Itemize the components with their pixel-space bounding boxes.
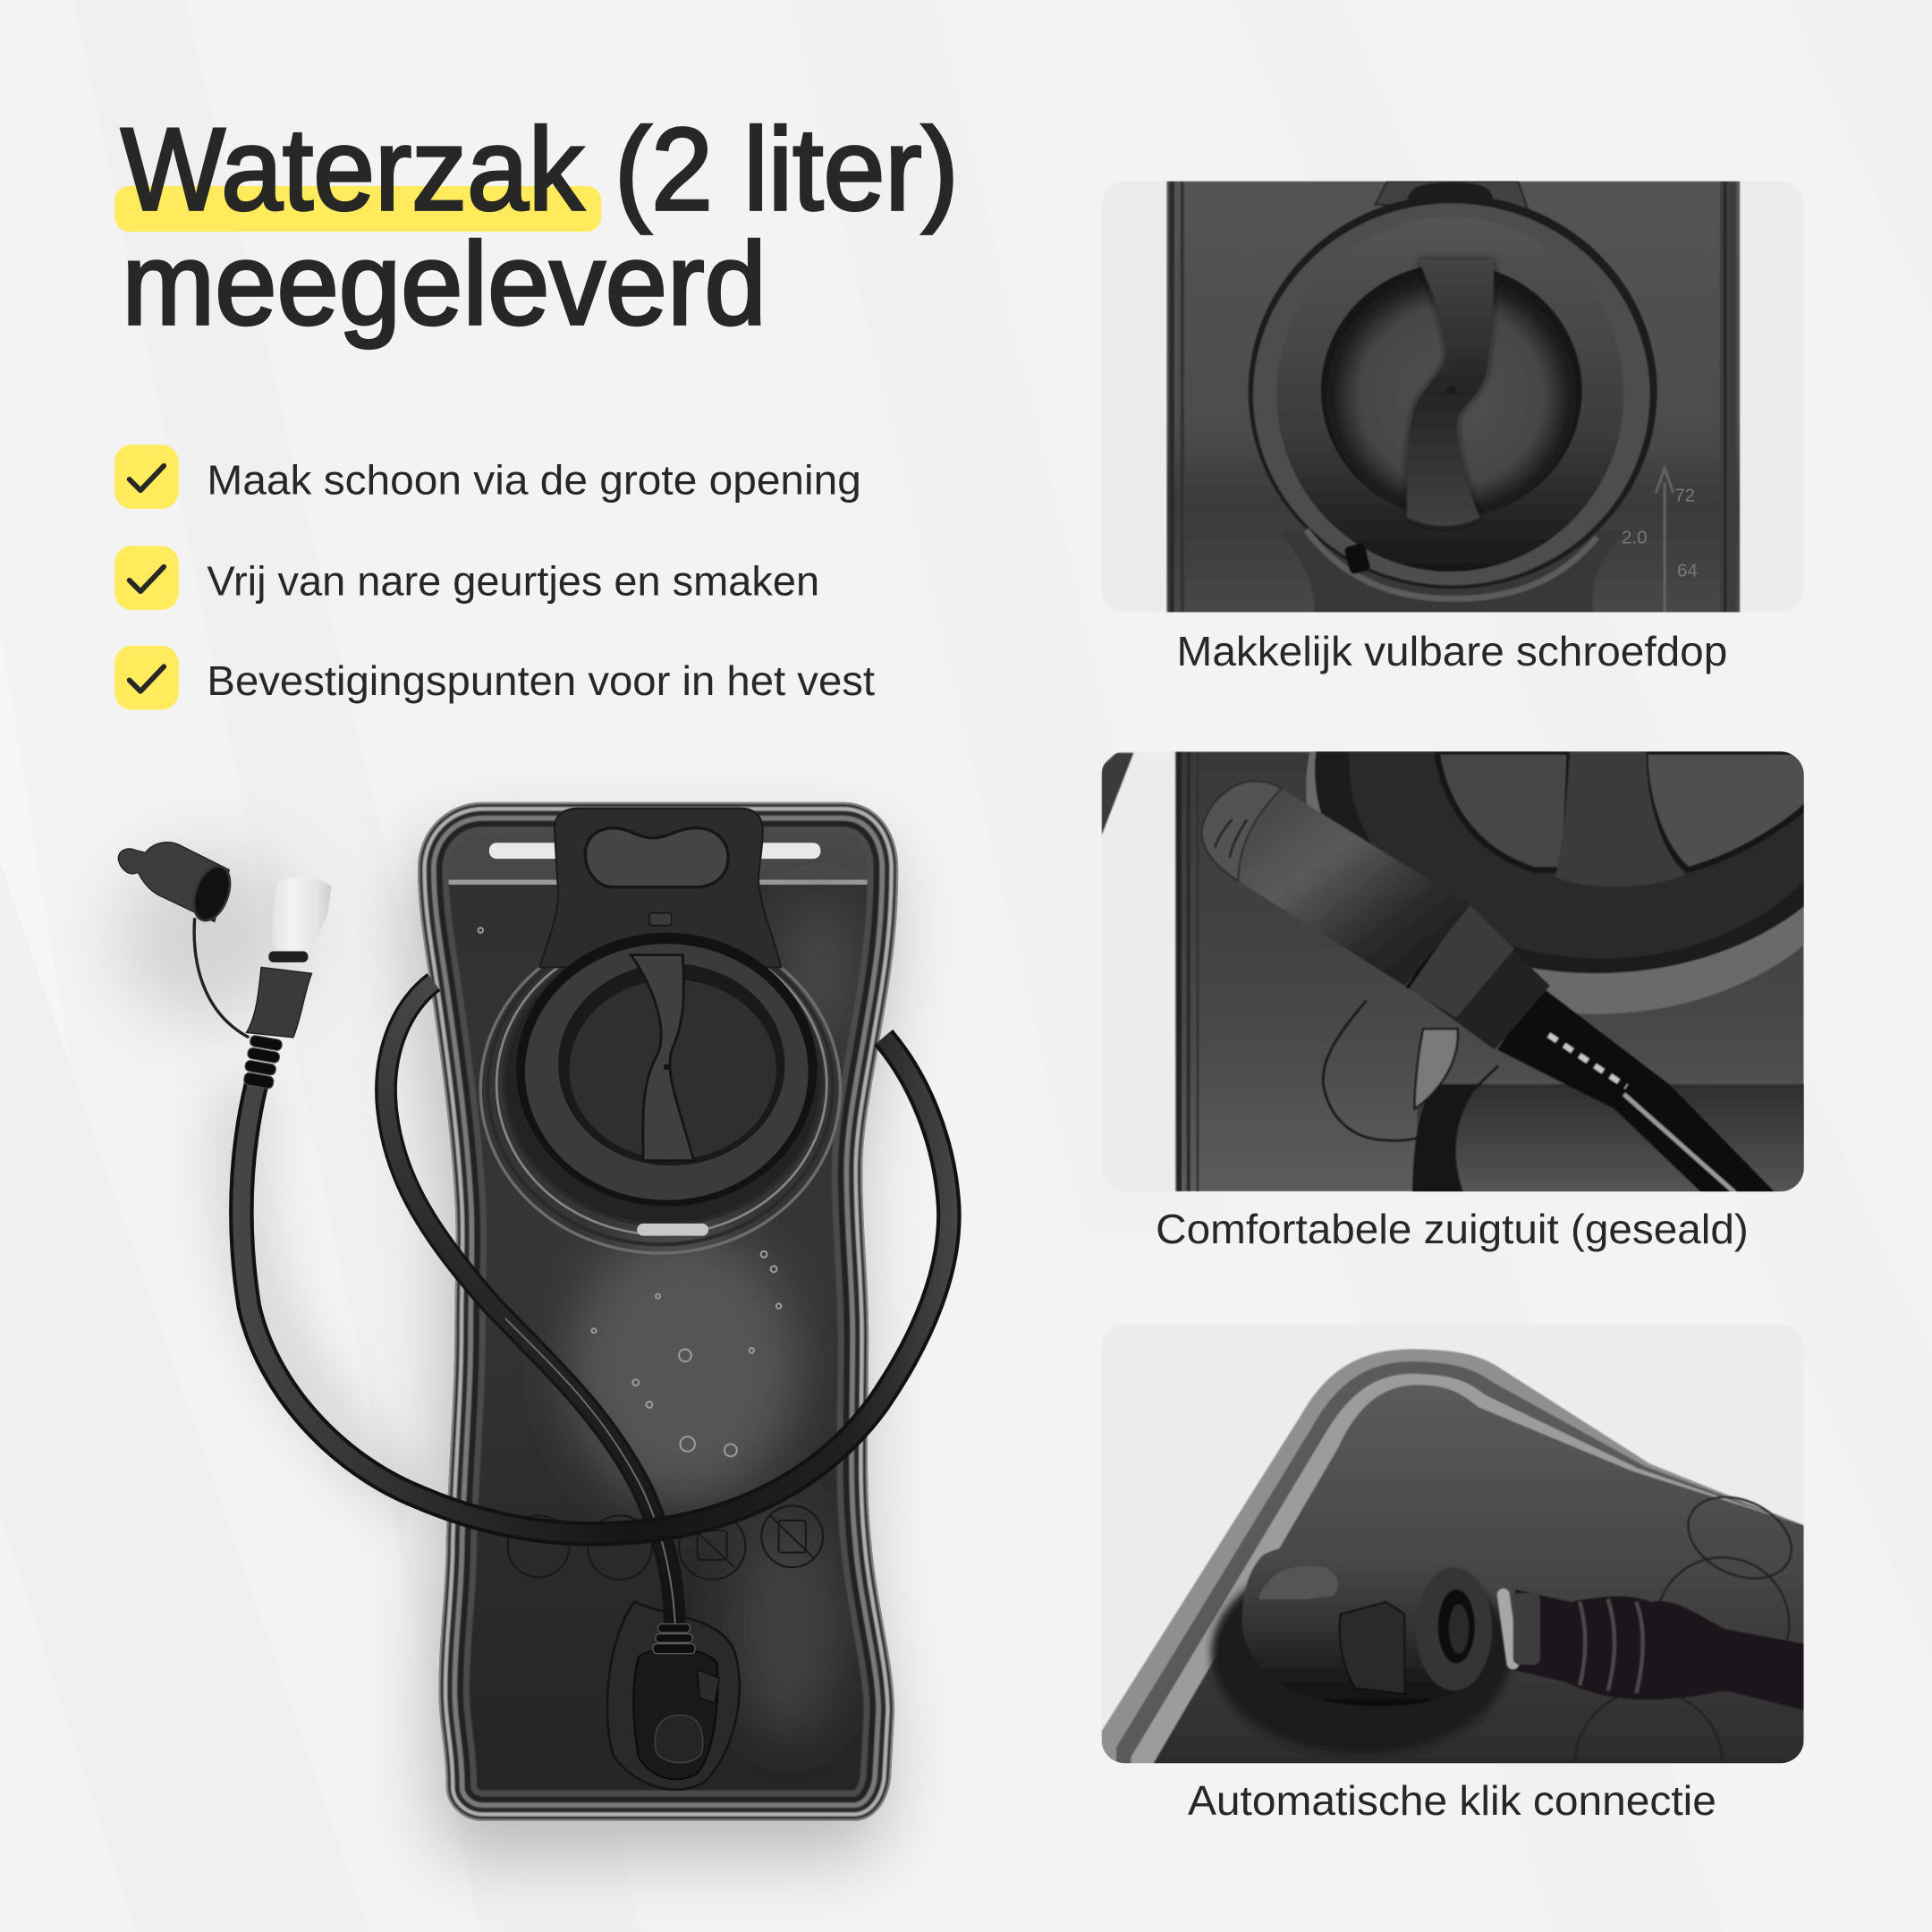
- title highlight: [114, 186, 601, 232]
- bottom connector ribs: [653, 1624, 695, 1654]
- hang slots: [489, 843, 820, 859]
- title line 1: Waterzak (2 liter): [121, 104, 959, 234]
- feature 1: Maak schoon via de grote opening: [207, 456, 861, 503]
- hose loop front: [242, 1038, 949, 1534]
- capacity marks: 64: [1677, 561, 1698, 581]
- bottom connector plate: [607, 1602, 740, 1790]
- caption 2: Comfortabele zuigtuit (geseald): [1156, 1206, 1749, 1252]
- panel: filler cap detail: [1165, 181, 1741, 613]
- product photo: hydration bladder with hose: [117, 789, 949, 1856]
- hose barb connector: [243, 1035, 283, 1089]
- panel 1 photo: [1167, 181, 1740, 613]
- pictogram row: [508, 1505, 823, 1580]
- lower cap slot: [637, 1224, 708, 1236]
- panel 1 background: [1102, 181, 1804, 613]
- fill cap seam rings: [480, 926, 840, 1253]
- product shadow: [117, 836, 891, 1856]
- title: [114, 104, 959, 349]
- caption 3: Automatische klik connectie: [1188, 1777, 1716, 1824]
- capacity marks: 72: [1674, 486, 1695, 506]
- feature 3: [114, 646, 875, 709]
- panel 2 photo: [1102, 751, 1804, 1191]
- bite valve: [247, 877, 332, 1038]
- handle tab: [539, 809, 781, 967]
- feature 2: [114, 546, 819, 610]
- feature 2: Vrij van nare geurtjes en smaken: [207, 557, 819, 604]
- panel 3 background: [1102, 1325, 1804, 1763]
- bag body: [407, 789, 911, 1836]
- S-shaped cap grip: [631, 955, 694, 1161]
- title line 2: meegeleverd: [122, 218, 767, 349]
- panel 2 background: [1102, 751, 1804, 1191]
- top film strip: [418, 801, 898, 885]
- feature 1: [114, 445, 861, 509]
- panel: quick-connect detail: [1102, 1348, 1804, 1764]
- capacity marks: 2.0: [1622, 527, 1648, 547]
- water sheen: [567, 900, 856, 1737]
- panel 3 photo: [1102, 1349, 1804, 1764]
- drink cap with tether: [118, 843, 249, 1038]
- handle hole: [585, 828, 728, 887]
- water droplets: [478, 928, 781, 1456]
- hose loop behind: [386, 982, 675, 1639]
- caption 1: Makkelijk vulbare schroefdop: [1177, 628, 1727, 674]
- panel: mouthpiece detail: [1102, 751, 1804, 1191]
- feature list: [114, 445, 875, 709]
- screw cap: [516, 933, 817, 1207]
- feature 3: Bevestigingspunten voor in het vest: [207, 657, 875, 704]
- bag seam stripes: [418, 802, 898, 1821]
- lid latch: [649, 913, 672, 926]
- capacity marks: [1622, 486, 1698, 581]
